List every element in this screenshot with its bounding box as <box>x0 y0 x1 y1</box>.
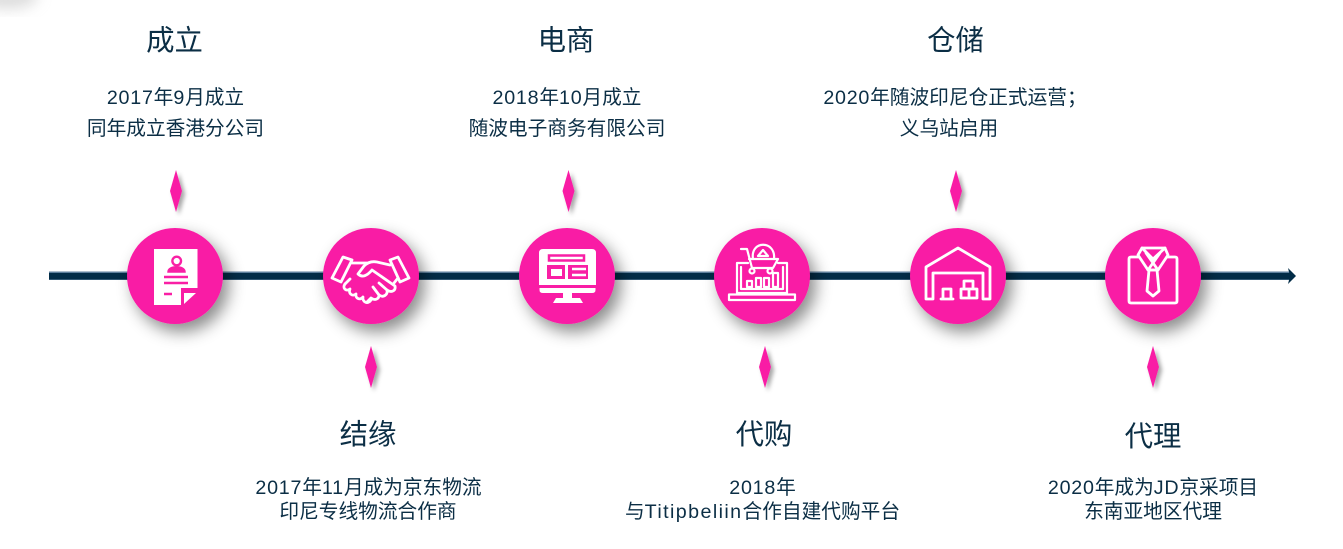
description: 成立: 同年成立香港分公司 <box>87 118 264 140</box>
timeline arrow <box>49 268 1296 284</box>
circle <box>323 228 419 324</box>
icon: shirt and tie <box>1129 248 1177 303</box>
description: 结缘: 印尼专线物流合作商 <box>279 501 457 523</box>
heading: 仓储: 仓储 <box>927 25 984 57</box>
heading: 代理: 代理 <box>1125 421 1181 453</box>
description: 结缘 <box>255 477 482 523</box>
diamond marker <box>562 170 574 212</box>
description: 代购 <box>625 477 900 523</box>
heading: 代购: 代购 <box>736 419 792 451</box>
description: 结缘: 2017年11月成为京东物流 <box>255 477 482 499</box>
description: 成立: 2017年9月成立 <box>107 87 244 109</box>
circle <box>519 228 615 324</box>
diamond marker <box>759 346 771 388</box>
description: 代理: 2020年成为JD京采项目 <box>1048 477 1258 499</box>
description: 代理: 东南亚地区代理 <box>1084 501 1222 523</box>
circle <box>910 228 1006 324</box>
description: 代购: 与Titipbeliin合作自建代购平台 <box>625 501 900 523</box>
icon: desktop monitor <box>539 249 596 303</box>
icon: warehouse <box>926 248 990 299</box>
description: 仓储: 义乌站启用 <box>900 118 998 140</box>
icon: laptop with cart <box>729 245 795 300</box>
description: 代理 <box>1048 477 1258 523</box>
diamond marker <box>950 170 962 212</box>
heading: 成立: 成立 <box>146 25 203 57</box>
icon: handshake <box>332 257 409 303</box>
milestone: 代购 <box>625 228 900 523</box>
circle <box>1105 228 1201 324</box>
diamond marker <box>1147 346 1159 388</box>
description: 仓储 <box>823 87 1087 140</box>
milestone: 电商 <box>469 25 665 324</box>
corner smudge <box>0 0 38 9</box>
milestone: 成立 <box>87 25 264 324</box>
milestone: 结缘 <box>255 228 482 523</box>
circle <box>127 228 223 324</box>
milestone: 代理 <box>1048 228 1258 523</box>
description: 电商: 2018年10月成立 <box>493 87 641 109</box>
description: 成立 <box>87 87 264 140</box>
circle <box>714 228 810 324</box>
diamond marker <box>170 170 182 212</box>
description: 电商: 随波电子商务有限公司 <box>469 118 665 140</box>
heading: 结缘: 结缘 <box>340 419 396 451</box>
description: 电商 <box>469 87 665 140</box>
icon: resume document <box>154 249 198 305</box>
description: 仓储: 2020年随波印尼仓正式运营； <box>823 87 1087 109</box>
milestone: 仓储 <box>823 25 1087 324</box>
diamond marker <box>365 346 377 388</box>
description: 代购: 2018年 <box>729 477 796 499</box>
heading: 电商: 电商 <box>538 25 594 57</box>
